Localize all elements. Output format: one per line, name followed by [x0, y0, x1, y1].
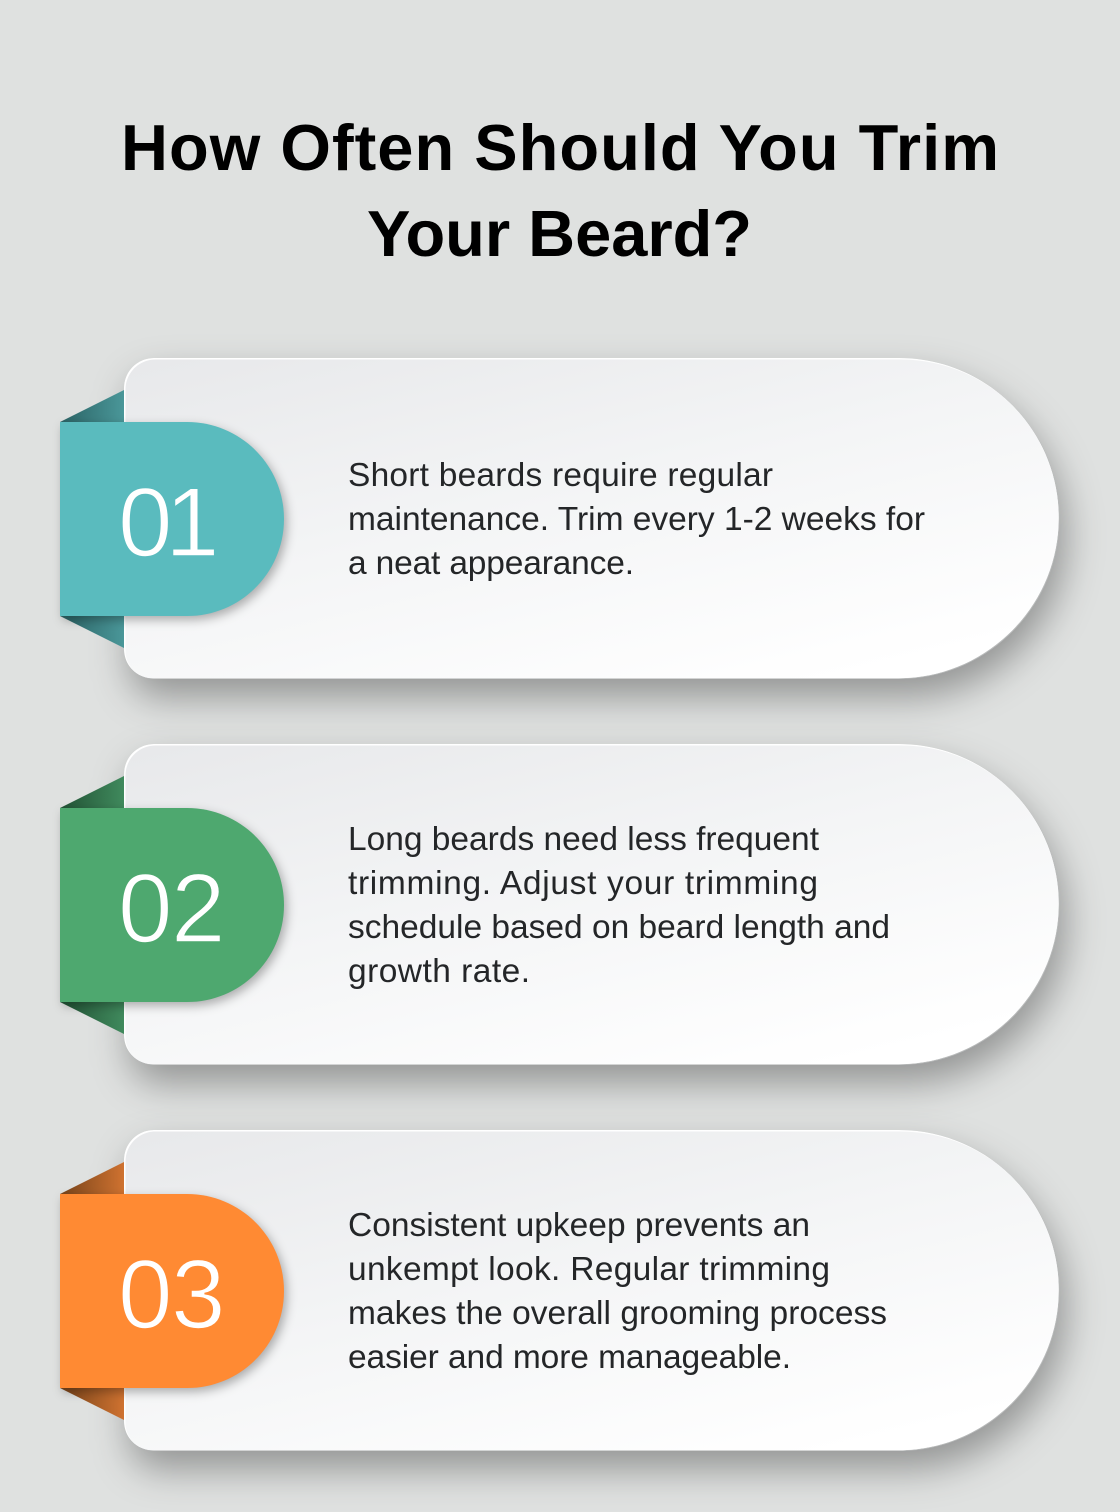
card 01	[120, 356, 1066, 697]
text: step 03: Consistent upkeep prevents an	[348, 1207, 810, 1244]
ribbon fold 02	[60, 776, 124, 1034]
number badge 02: 02	[118, 853, 226, 963]
text: step 02: Long beards need less frequent	[348, 821, 820, 858]
ribbon fold 03	[60, 1162, 124, 1420]
text: step 01: a neat appearance.	[348, 545, 634, 582]
number badge 02	[60, 808, 287, 1006]
title: How Often Should You Trim	[121, 111, 999, 184]
number badge 01	[60, 422, 287, 620]
text: step 02: growth rate.	[348, 953, 530, 990]
card 03	[120, 1128, 1066, 1469]
number badge 03	[60, 1194, 287, 1392]
text: step 02: trimming. Adjust your trimming	[348, 865, 818, 902]
text: step 01: maintenance. Trim every 1-2 weeks for	[348, 501, 925, 538]
text: step 01: Short beards require regular	[348, 457, 773, 494]
ribbon fold 01	[60, 390, 124, 648]
panel: step 03	[60, 1128, 1066, 1469]
card 02	[120, 742, 1066, 1083]
text: step 02: schedule based on beard length and	[348, 909, 890, 946]
text: step 02	[348, 821, 890, 990]
text: step 03: easier and more manageable.	[348, 1339, 791, 1376]
text: step 01	[348, 457, 925, 582]
text: step 03: unkempt look. Regular trimming	[348, 1251, 830, 1288]
title: Your Beard?	[367, 197, 752, 270]
panel: step 01	[60, 356, 1066, 697]
title	[121, 111, 999, 270]
number badge 01: 01	[118, 467, 220, 577]
number badge 03: 03	[118, 1239, 226, 1349]
text: step 03: makes the overall grooming process	[348, 1295, 887, 1332]
text: step 03	[348, 1207, 887, 1376]
panel: step 02	[60, 742, 1066, 1083]
